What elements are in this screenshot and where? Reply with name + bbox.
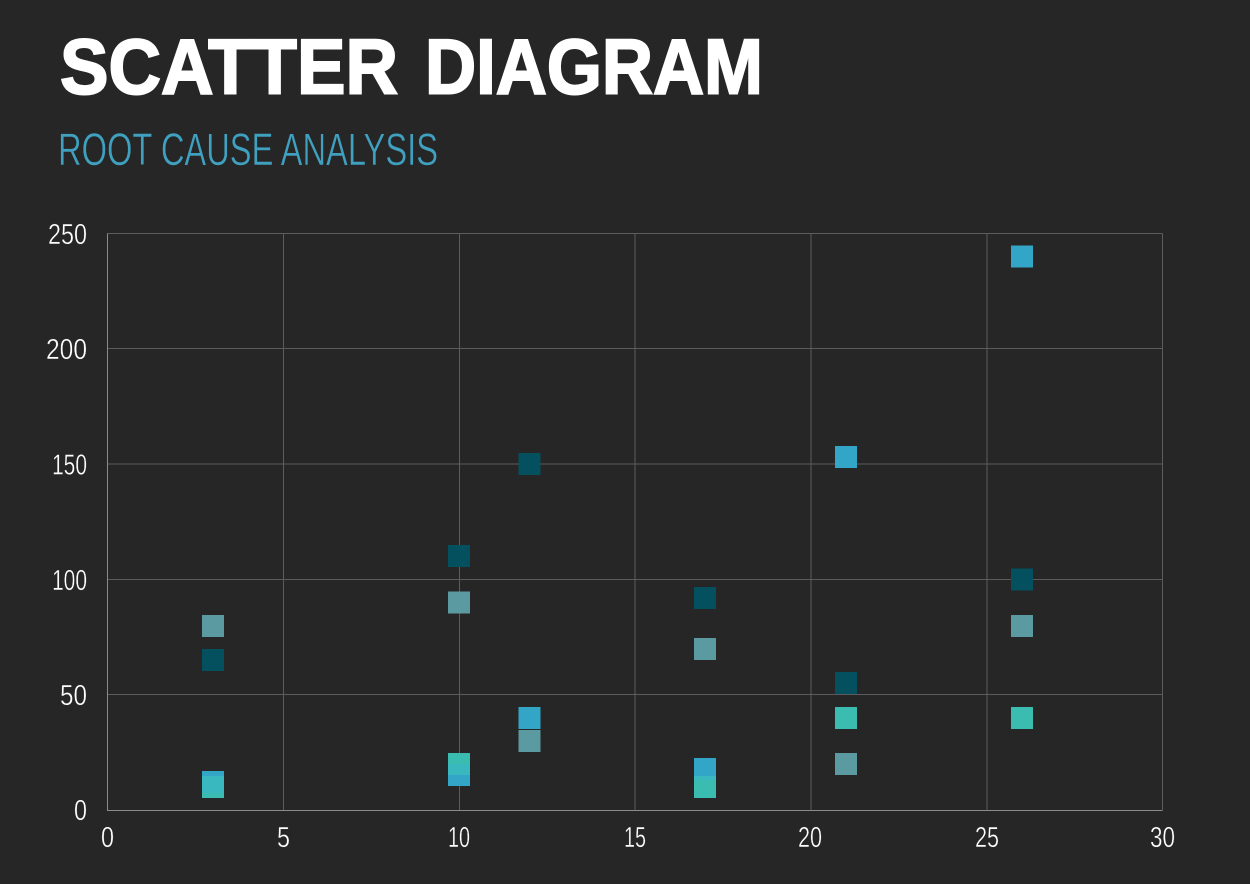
x axis labels: 10 — [448, 822, 470, 854]
y axis labels: 50 — [60, 680, 87, 712]
title — [60, 22, 763, 110]
x axis labels: 5 — [277, 822, 290, 854]
series: blue markers — [202, 246, 1033, 793]
x axis labels: 15 — [624, 822, 646, 854]
series: grey-teal markers — [202, 592, 1033, 775]
series: dark teal markers — [202, 453, 1033, 694]
subtitle: ROOT CAUSE ANALYSIS — [58, 124, 438, 175]
x axis labels: 20 — [798, 822, 822, 854]
x axis labels — [101, 822, 1175, 854]
y axis labels: 0 — [74, 795, 87, 827]
y axis labels — [46, 219, 87, 827]
title: SCATTER — [60, 22, 398, 110]
x axis labels: 30 — [1150, 822, 1175, 854]
x axis labels: 25 — [975, 822, 999, 854]
y axis labels: 100 — [52, 565, 87, 597]
scatter chart — [46, 219, 1175, 854]
y axis labels: 250 — [48, 219, 87, 251]
x axis labels: 0 — [101, 822, 114, 854]
series: green-teal markers — [202, 707, 1033, 798]
y axis labels: 150 — [52, 450, 87, 482]
title: DIAGRAM — [425, 22, 763, 110]
y axis labels: 200 — [46, 334, 87, 366]
